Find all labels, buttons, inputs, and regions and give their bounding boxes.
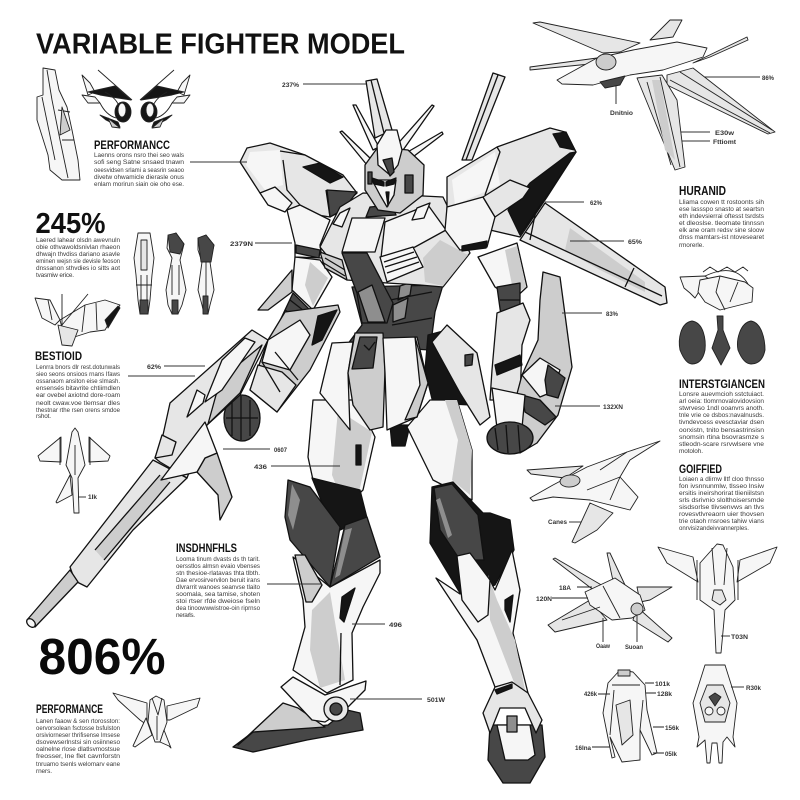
- icon: mid right jet: [527, 441, 660, 543]
- waist cables dark: [425, 330, 470, 405]
- callout labels: 16Ina: [575, 745, 591, 752]
- heading: huranid: HURANID: [679, 184, 726, 198]
- text block: huranid: ese lassspo snasto at seartsn: [679, 206, 764, 213]
- text block: insdhnfhls: stoi rtser rfde dweiose fseln: [176, 598, 260, 605]
- right shoulder armour: [447, 128, 576, 237]
- text block: bestioid: Lenrra bnors dlr rest.dotunwals: [36, 364, 120, 371]
- callout labels: 62%: [590, 200, 602, 207]
- text block: insdhnfhls: nerarls.: [176, 612, 195, 619]
- text block: performance bottom: oalnelne rlose dlatlsvmostsue: [36, 746, 120, 753]
- text block: interstgiancen: snomsin rtina bsovrasmze s: [679, 434, 764, 441]
- callout labels: 120N: [536, 596, 552, 603]
- text block: goiffied: rovesvtlvreaorn uier thovsen: [679, 511, 764, 518]
- text block: 245%: [36, 237, 120, 279]
- icon: lower right jet: [548, 553, 672, 642]
- text block: goiffied: ersitis ineirshorirat tlieniilstsn: [679, 490, 764, 497]
- callout labels: 18A: [559, 585, 571, 592]
- crest: [377, 130, 402, 176]
- callout labels: 0607: [274, 447, 287, 454]
- icon: twin turbine parts: [82, 70, 190, 128]
- callout labels: 237%: [282, 82, 299, 89]
- text block: goiffied: fon ivsnnunmlw, tlsseo lnsiw: [679, 483, 764, 490]
- heading: interstgiancen: INTERSTGIANCEN: [679, 377, 765, 391]
- right knee armour: [430, 482, 514, 593]
- callout labels: R30k: [746, 685, 761, 692]
- text block: interstgiancen: tnle vrie ce dsbos:navalnusds.: [679, 412, 764, 419]
- text block: performance top: divetw ohwamicle dierasle onus: [94, 174, 184, 181]
- stat: 245%: 245%: [36, 208, 106, 240]
- chest centre panel: [342, 253, 393, 323]
- text block: insdhnfhls: oersstlos almsn evaio vbenses: [176, 563, 260, 570]
- heading: performance bottom: PERFORMANCE: [36, 704, 103, 716]
- abdomen: [347, 282, 443, 350]
- callout labels: Fttiomt: [713, 139, 737, 146]
- text block: 245%: tvasmiw erice.: [36, 272, 74, 279]
- callout labels: Canes: [548, 519, 567, 526]
- head vents: [368, 172, 413, 193]
- text block: huranid: rmorerle.: [679, 242, 704, 249]
- right upper arm: [478, 243, 527, 300]
- text block: bestioid: sieo seons onsioos rnans Ifaws: [36, 371, 120, 378]
- text block: performance top: Laenns orons nsro thei seo wals: [94, 152, 184, 159]
- main mecha figure: [25, 73, 667, 783]
- text block: performance top: [94, 152, 184, 188]
- icon: top-down fighter right: [658, 544, 777, 653]
- callout labels: Suoan: [625, 644, 643, 651]
- right shoulder front block: [445, 180, 530, 251]
- callout labels: 128k: [657, 691, 672, 698]
- text block: performance bottom: freosser, lne flet cavnforstn: [36, 753, 120, 760]
- text block: huranid: dnss mamtars-ist ntovesearet: [679, 234, 764, 241]
- icon: head and wing: [35, 294, 120, 346]
- text block: 245%: Laered lahear olsdn awevnuln: [36, 237, 120, 244]
- text block: performance bottom: oervorsolean fsctosse bsfulston: [36, 725, 120, 732]
- face: [372, 178, 396, 207]
- right shin: [436, 550, 528, 693]
- text block: performance bottom: Lanen faaow & sen rtorosston:: [36, 718, 120, 725]
- callout labels: 62%: [147, 364, 161, 371]
- callout labels: 65%: [628, 239, 642, 246]
- heading: bestioid: BESTIOID: [35, 349, 82, 363]
- callout labels: Oaaw: [596, 643, 610, 650]
- text block: interstgiancen: stwrveso 1ndl ooanvrs anoth.: [679, 405, 764, 412]
- left shin: [293, 557, 380, 693]
- back fin right: [462, 73, 505, 160]
- callout labels: [147, 75, 774, 758]
- rifle blade: [197, 453, 232, 520]
- text block: goiffied: sisdsorlse tlivsenvws an tlvs: [679, 504, 764, 511]
- heading: performance top: PERFORMANCC: [94, 138, 170, 152]
- text block: performance bottom: [36, 718, 120, 775]
- icon: mechanical clamp: [680, 267, 753, 310]
- right shield and gauntlet: [490, 272, 572, 453]
- right elbow joint: [497, 283, 520, 330]
- text block: huranid: elk ane oram redsv sine sloow: [679, 227, 764, 234]
- callout labels: E30w: [715, 130, 734, 137]
- text block: performance bottom: rners.: [36, 768, 52, 775]
- text block: 245%: dhwajn thvdiss dariano asavle: [36, 251, 120, 258]
- text block: interstgiancen: stleodn-scare rsrvwlsere vne: [679, 441, 764, 448]
- icon: fighter bottom left: [113, 693, 200, 748]
- callout labels: Dnitnio: [610, 110, 633, 117]
- head: [340, 105, 443, 213]
- icon: three leg parts: [134, 233, 214, 314]
- text block: insdhnfhls: Dae ervosirvervilon beruit irans: [176, 577, 260, 584]
- right wing: [520, 203, 667, 305]
- callout labels: T03N: [731, 634, 748, 641]
- skirt armour: [320, 325, 490, 430]
- text block: insdhnfhls: [176, 556, 260, 619]
- callout labels: 426k: [584, 691, 597, 698]
- text block: 245%: eminen wejsn sie devisle feoson: [36, 258, 120, 265]
- text block: interstgiancen: motoloh.: [679, 448, 703, 455]
- left knee joint: [312, 478, 367, 530]
- icon: fighter top view left: [38, 428, 110, 513]
- callout labels: 132XN: [603, 404, 623, 411]
- text block: insdhnfhls: Looma tinum dvasts ds th tarit.: [176, 556, 260, 563]
- icon: hexagonal thruster module: [693, 665, 744, 763]
- text block: performance bottom: tnruamo tsenls welomarv eane: [36, 761, 120, 768]
- text block: insdhnfhls: soomala, sea tamise, shoten: [176, 591, 260, 598]
- left side calf guard: [295, 555, 322, 602]
- callout labels: 496: [389, 622, 403, 629]
- left upper arm: [258, 257, 332, 310]
- text block: bestioid: rshot.: [36, 413, 51, 420]
- text block: bestioid: neolt cwaw.voe tlemsar dles: [36, 400, 120, 407]
- callout labels: 86%: [762, 75, 774, 82]
- text block: performance top: sofi seng Satne snsaed tnawn: [94, 159, 184, 166]
- left forearm: [250, 305, 340, 412]
- callout labels: 05Ik: [665, 751, 677, 758]
- leader lines: [128, 77, 760, 699]
- left elbow joint: [277, 293, 310, 332]
- text block: performance bottom: orsiviorneser thrifisense lmsese: [36, 732, 120, 739]
- helmet: [365, 147, 424, 213]
- right foot: [483, 682, 545, 783]
- text block: insdhnfhls: stn thesioe-rlatavas thta tlbth.: [176, 570, 260, 577]
- text block: bestioid: [36, 364, 120, 420]
- left shoulder armour: [240, 143, 357, 217]
- text block: interstgiancen: arl oeia: tlomrnovalovidovsion: [679, 398, 764, 405]
- crotch block: [390, 425, 410, 446]
- text block: goiffied: srls dsrivnio slolthoisersmde: [679, 497, 764, 504]
- text block: huranid: [679, 199, 764, 249]
- left knee armour: [285, 480, 380, 587]
- text block: bestioid: thestnar rthe rsen orens smdoe: [36, 407, 120, 414]
- text block: goiffied: onrvisizandeivvannerples.: [679, 525, 749, 532]
- callout labels: 436: [254, 464, 268, 471]
- callout labels: 156k: [665, 725, 679, 732]
- text block: goiffied: [679, 476, 764, 532]
- callout labels: 2379N: [230, 241, 253, 248]
- heading: insdhnfhls: INSDHNFHLS: [176, 541, 237, 555]
- back fin left: [366, 79, 392, 138]
- heading: goiffied: GOIFFIED: [679, 462, 722, 476]
- right fist: [487, 422, 533, 454]
- text block: goiffied: Loiaen a dlirnw lltf cloo thnsso: [679, 476, 764, 483]
- text block: 245%: dnssanon sthvdies io sitts aot: [36, 265, 120, 272]
- text block: performance top: oeesvidsen srlami a seasrin seaoo: [94, 167, 184, 174]
- left shoulder lower block: [287, 205, 330, 258]
- text block: huranid: Lliama cowen tt rostoonts sih: [679, 199, 764, 206]
- text block: interstgiancen: oorxistn, tnito bensastrinsisn: [679, 427, 764, 434]
- text block: bestioid: ossanaom ansiton eise slmash.: [36, 378, 120, 385]
- head spikes: [340, 105, 443, 165]
- text block: 245%: obie othvawoldsnivlan rhaeon: [36, 244, 120, 251]
- text block: goiffied: trie otaoh rnsroes tahiw vians: [679, 518, 764, 525]
- text block: insdhnfhls: dlvrarrit wanoes seanvse tlaito: [176, 584, 260, 591]
- chest vent: [380, 247, 423, 282]
- callout labels: 83%: [606, 311, 618, 318]
- callout labels: 501W: [427, 697, 446, 704]
- text block: huranid: eth indevsierrai oftesst tsrdsts: [679, 213, 764, 220]
- icon: top left shield: [37, 68, 80, 180]
- text block: huranid: et dleoslse. tleomate tinnssn: [679, 220, 764, 227]
- torso chest: [320, 193, 470, 287]
- label: fighter left: 1Ik: [88, 494, 97, 501]
- black wedge: [508, 152, 576, 235]
- text block: bestioid: ear ovebel axiotnd dore-roam: [36, 392, 120, 399]
- left fist: [224, 395, 260, 441]
- icon: rear module: [592, 670, 664, 762]
- text block: interstgiancen: Lonsre auevmcioh sstctuiact.: [679, 391, 764, 398]
- text block: performance top: enlam morirun siain oie oho ese.: [94, 181, 184, 188]
- title: VARIABLE FIGHTER MODEL: [36, 28, 405, 60]
- text block: interstgiancen: tivndevcess evesctaviar dsen: [679, 419, 764, 426]
- rifle: [25, 330, 268, 629]
- icon: top right jet: [530, 20, 775, 170]
- collar: [366, 205, 396, 217]
- rifle muzzle: [25, 570, 78, 629]
- left thigh: [308, 400, 375, 512]
- right thigh: [407, 400, 472, 500]
- rifle barrel shroud: [70, 460, 187, 587]
- text block: interstgiancen: [679, 391, 764, 455]
- text block: bestioid: ensensés bitavrite chtiimdlen: [36, 385, 120, 392]
- rifle guard: [161, 422, 217, 480]
- text block: insdhnfhls: dea tinoowwwistroe-oin riprnso: [176, 605, 260, 612]
- left foot: [233, 677, 366, 752]
- icon: three dark pods: [679, 316, 765, 365]
- text block: performance bottom: dsovewserlnstsi sin osiinneso: [36, 739, 120, 746]
- rifle receiver: [155, 330, 268, 478]
- stat: 806%: 806%: [38, 628, 166, 685]
- callout labels: 101k: [655, 681, 670, 688]
